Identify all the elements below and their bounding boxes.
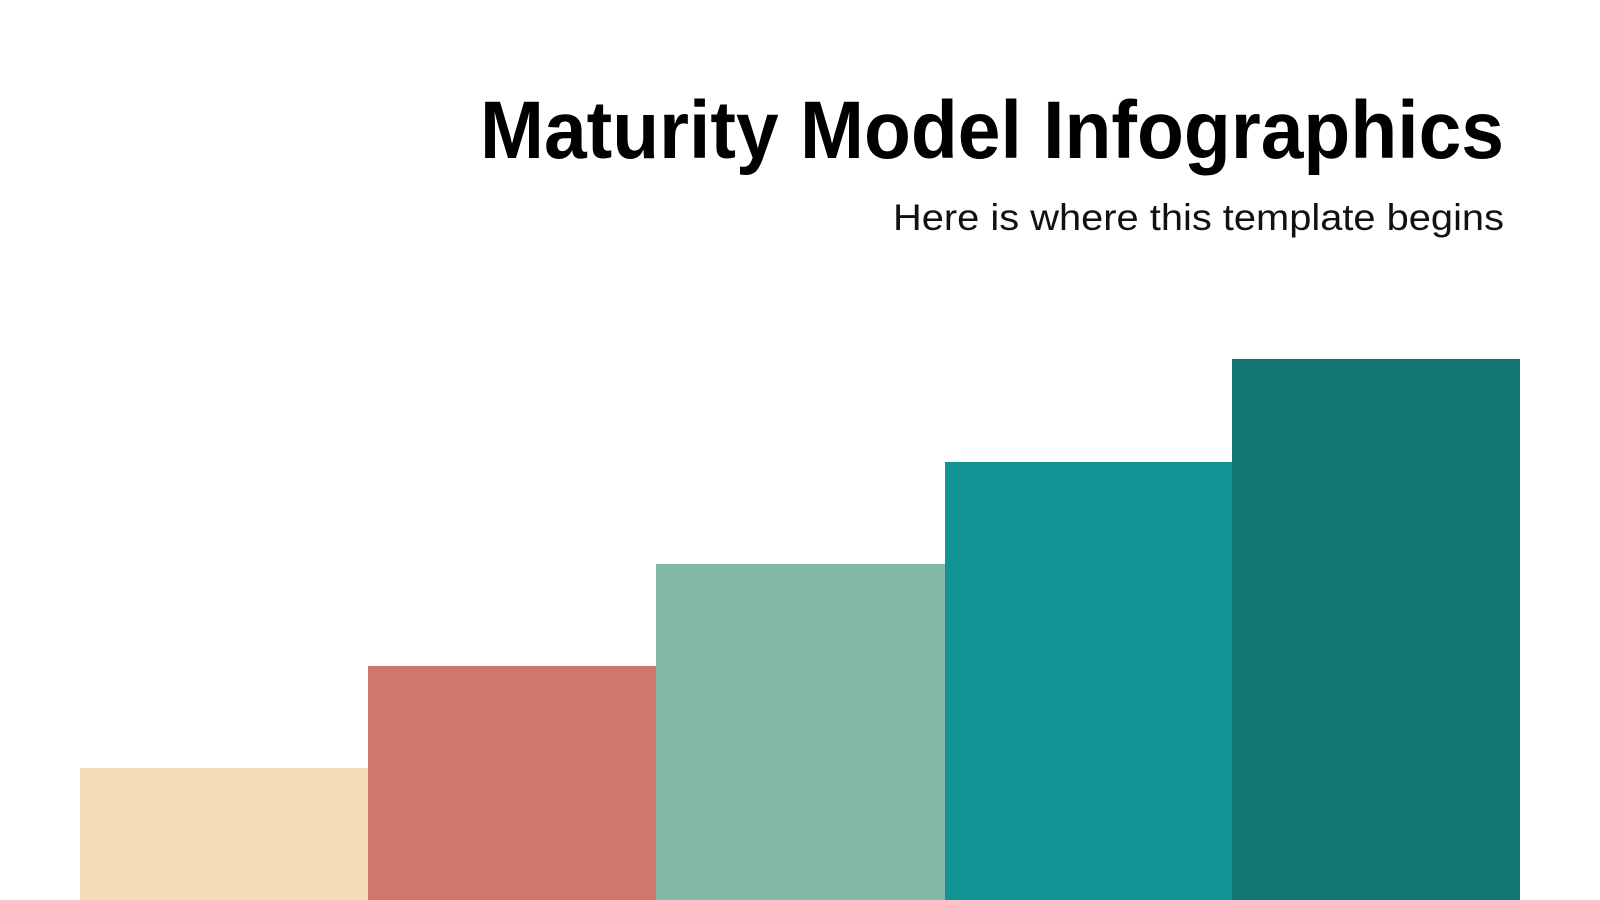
- bar: level 5: [1232, 359, 1520, 900]
- bar: level 3: [656, 564, 945, 900]
- bar: level 1: [80, 768, 368, 900]
- title: Here is where this template begins: [893, 197, 1504, 238]
- bar: level 2: [368, 666, 656, 900]
- title: Maturity Model Infographics: [480, 85, 1504, 176]
- title: [480, 85, 1504, 238]
- bar: level 4: [945, 462, 1232, 900]
